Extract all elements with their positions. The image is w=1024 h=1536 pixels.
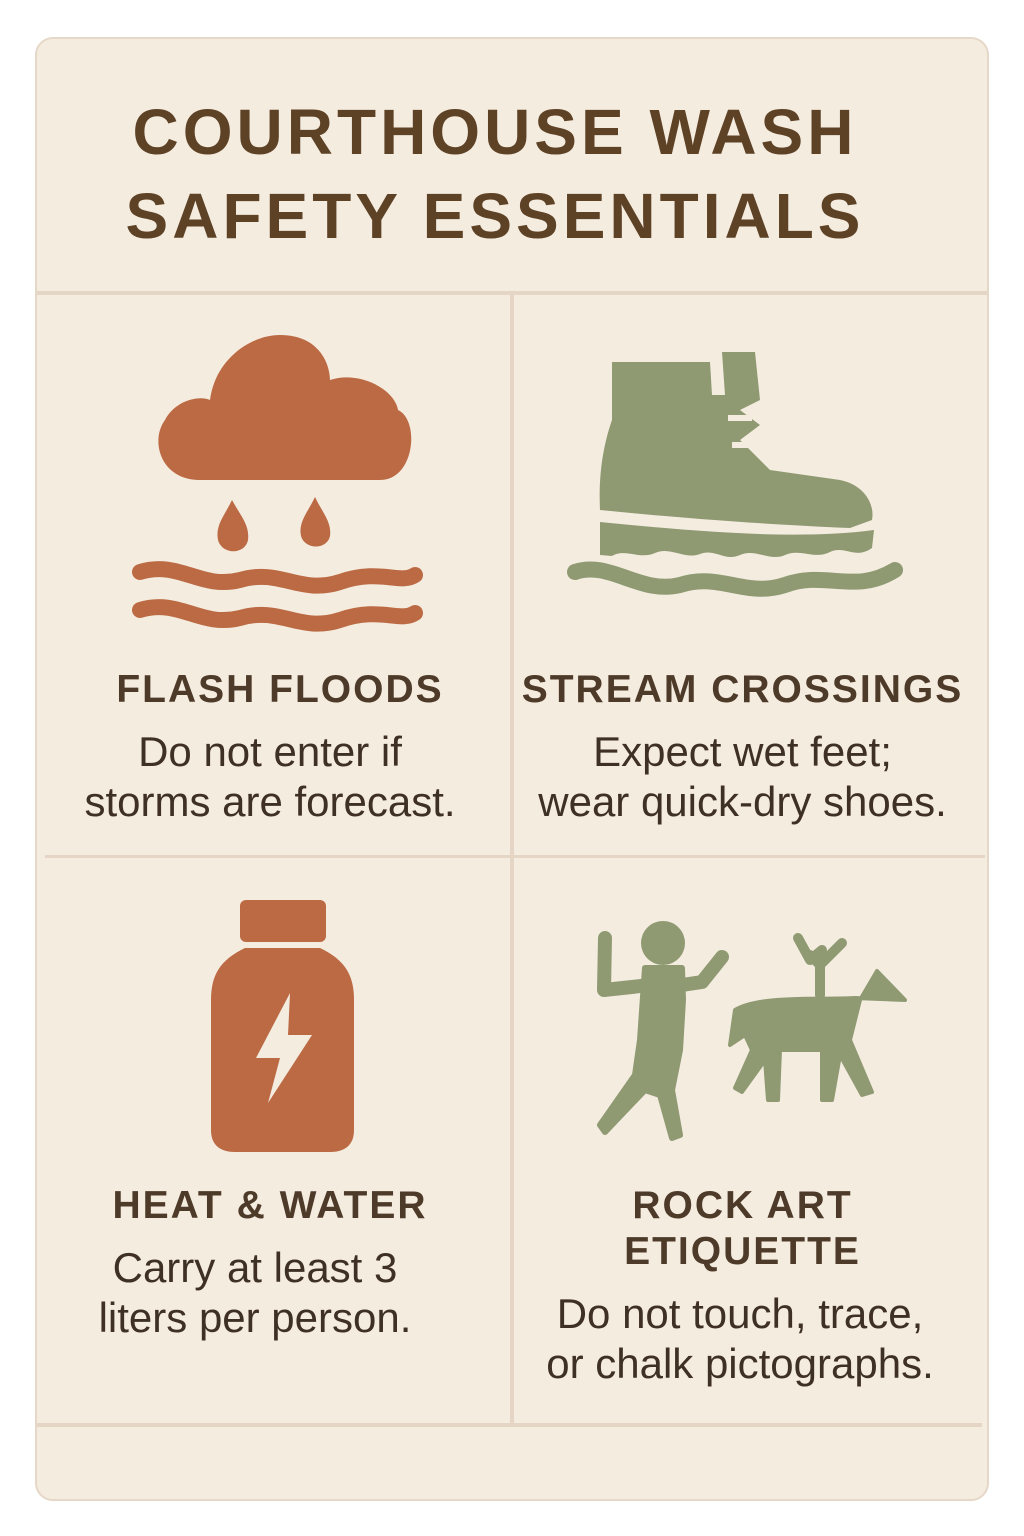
title: COURTHOUSE WASH: [133, 96, 857, 168]
text: rock art etiquette: Do not touch, trace,: [557, 1290, 923, 1337]
text: flash floods: Do not enter if: [138, 728, 402, 775]
title: [126, 96, 864, 252]
heading: rock art etiquette: ROCK ART: [632, 1184, 853, 1227]
heading: heat & water: HEAT & WATER: [112, 1184, 428, 1227]
text: rock art etiquette: [546, 1290, 934, 1387]
text: flash floods: storms are forecast.: [84, 778, 456, 825]
text: stream crossings: wear quick-dry shoes.: [538, 778, 947, 825]
text: stream crossings: [538, 728, 947, 825]
icon: bottle: [211, 900, 354, 1152]
icon: boot: [567, 352, 903, 597]
text: heat & water: Carry at least 3: [113, 1244, 397, 1291]
text: stream crossings: Expect wet feet;: [593, 728, 892, 775]
heading: stream crossings: STREAM CROSSINGS: [522, 668, 963, 711]
text: rock art etiquette: or chalk pictographs.: [546, 1340, 934, 1387]
heading: rock art etiquette: [624, 1184, 861, 1273]
text: flash floods: [84, 728, 456, 825]
icon: flash flood: [132, 335, 423, 632]
icon: petroglyphs: [597, 921, 907, 1141]
text: heat & water: liters per person.: [99, 1294, 411, 1341]
text: heat & water: [99, 1244, 411, 1341]
heading: rock art etiquette: ETIQUETTE: [624, 1230, 861, 1273]
title: SAFETY ESSENTIALS: [126, 180, 864, 252]
heading: flash floods: FLASH FLOODS: [116, 668, 444, 711]
